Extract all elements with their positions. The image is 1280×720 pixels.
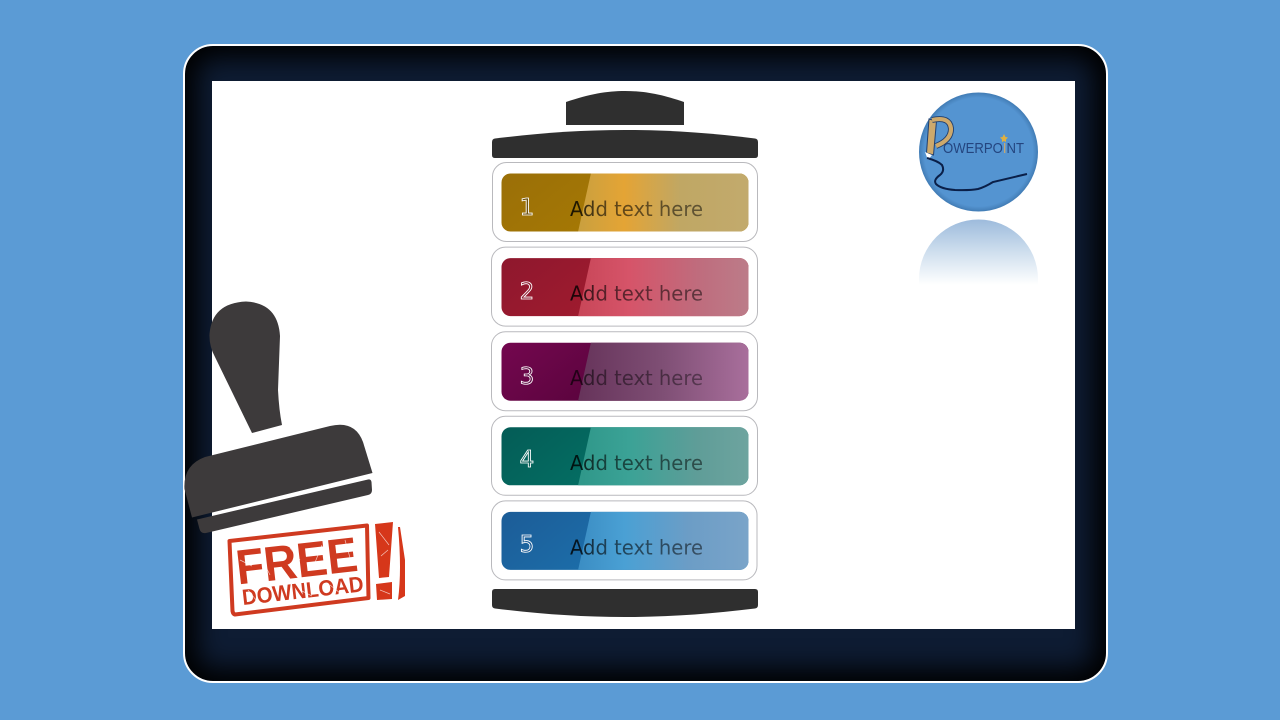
stamp label: download: DOWNLOAD <box>241 571 365 610</box>
row 4 text: Add text here <box>570 451 703 475</box>
infographic artwork <box>184 91 1038 617</box>
stamp icon <box>184 302 372 533</box>
row 2 text: Add text here <box>570 282 703 306</box>
row 5 number: 5 <box>520 532 534 558</box>
row 1 <box>492 162 758 242</box>
logo pen letter P <box>926 119 951 155</box>
row 3 text: Add text here <box>570 366 703 390</box>
row 3 <box>492 332 758 411</box>
logo: powerpoint badge <box>920 93 1038 211</box>
row 2 <box>492 247 758 326</box>
row 5 outer box <box>492 501 757 580</box>
slide area <box>212 81 1075 629</box>
exclamation shadow <box>398 527 405 600</box>
exclamation mark <box>375 522 393 600</box>
row 4 <box>492 416 758 495</box>
row 2 outer box <box>492 247 758 326</box>
row 4 colour bar <box>501 427 749 486</box>
stamp handle <box>209 302 282 433</box>
battery base <box>492 589 758 617</box>
stamp pad <box>197 479 372 533</box>
row 1 outer box <box>492 162 758 242</box>
logo ink line <box>927 158 1027 190</box>
row 1 text: Add text here <box>570 197 703 221</box>
row 3 colour bar <box>501 342 749 401</box>
row 2 number: 2 <box>520 279 534 305</box>
logo wordmark: OWERPOINT <box>943 141 1024 157</box>
stamp border <box>230 526 368 614</box>
row 5 colour bar <box>500 511 749 570</box>
logo reflection <box>919 220 1038 285</box>
row 4 number: 4 <box>520 447 534 473</box>
stamp wear marks <box>240 532 390 600</box>
stamp body <box>184 425 372 518</box>
row 2 colour bar <box>501 258 749 317</box>
row 5 text: Add text here <box>570 535 703 559</box>
battery top cap <box>566 91 684 125</box>
free download stamp <box>230 522 405 614</box>
row 5 <box>492 501 757 580</box>
tablet frame <box>183 44 1108 683</box>
battery lid <box>492 130 758 158</box>
logo circle <box>920 93 1038 211</box>
row 3 number: 3 <box>520 364 534 390</box>
stamp label: free: FREE <box>233 528 360 595</box>
row 1 colour bar <box>501 173 749 232</box>
row 3 outer box <box>492 332 758 411</box>
logo star <box>1000 134 1008 142</box>
logo pen tip <box>925 152 932 160</box>
row 1 number: 1 <box>520 195 534 221</box>
row 4 outer box <box>492 416 758 495</box>
